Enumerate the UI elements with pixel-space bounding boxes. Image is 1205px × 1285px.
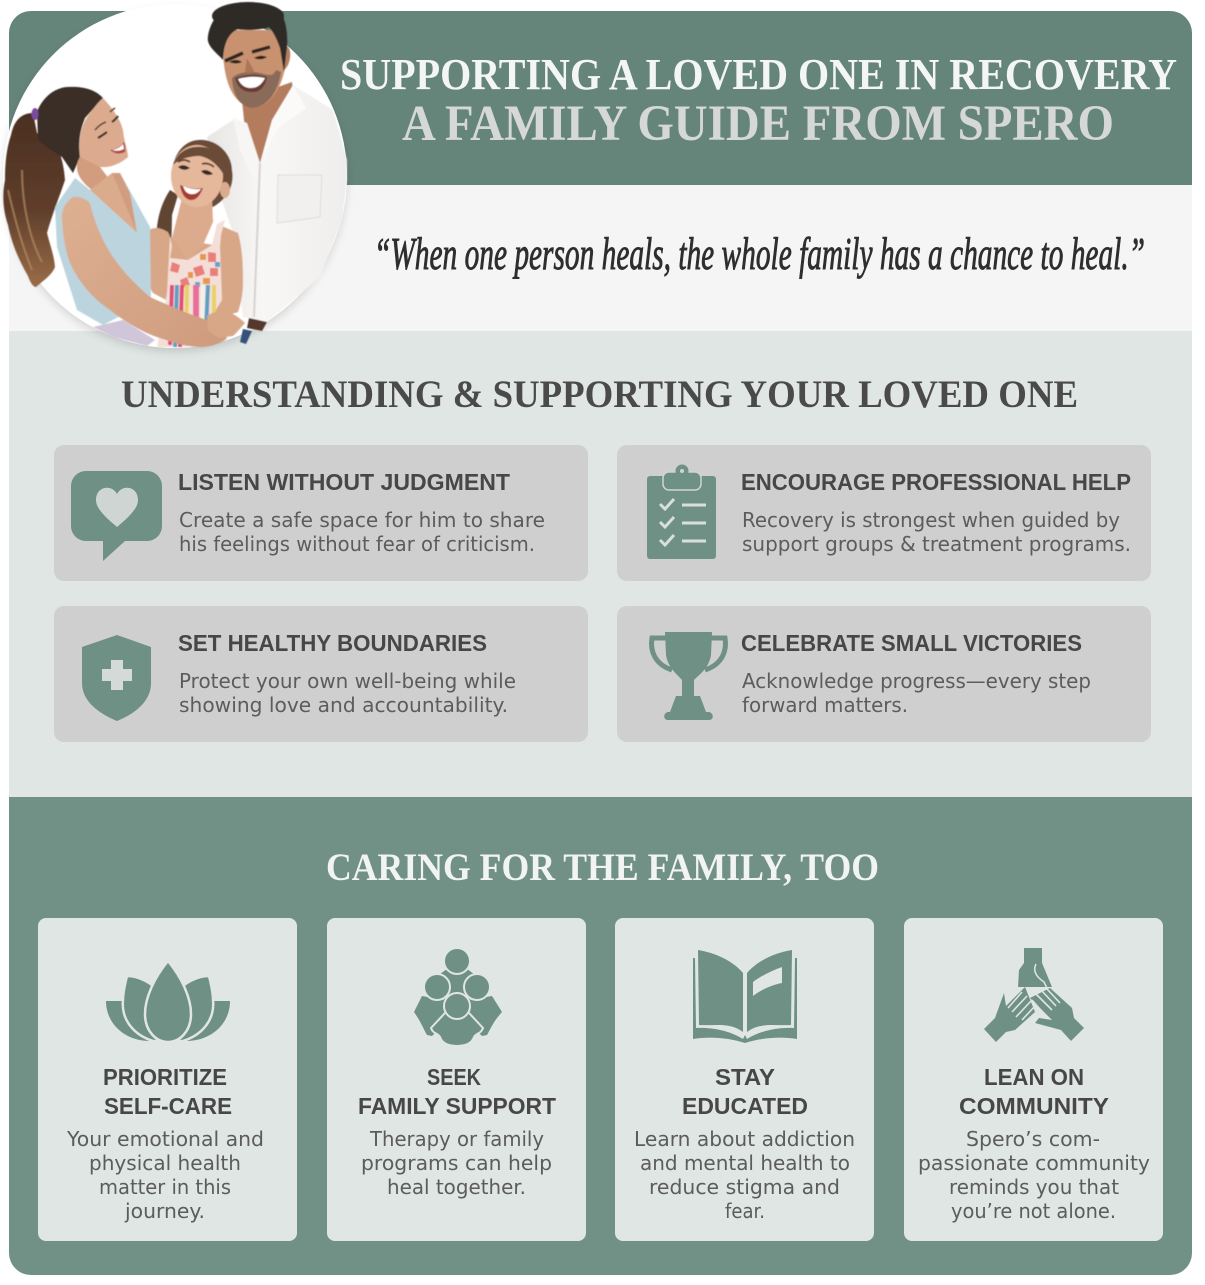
panel: understanding and supporting (9, 331, 1192, 797)
card text: reduce stigma and (649, 1175, 840, 1199)
heading: understanding and supporting: UNDERSTANDING & SUPPORTING YOUR LOVED ONE (121, 373, 1078, 416)
heading: caring for the family: CARING FOR THE FAMILY, TOO (326, 846, 879, 889)
card text: Spero’s com- (966, 1127, 1100, 1151)
family photo circle (3, 2, 347, 348)
card heading: SELF-CARE (104, 1093, 232, 1119)
card text (179, 669, 516, 717)
card text: Your emotional and (66, 1127, 264, 1151)
card heading: ENCOURAGE PROFESSIONAL HELP (741, 469, 1131, 495)
icon: trophy (652, 632, 725, 720)
card heading: SET HEALTHY BOUNDARIES (178, 630, 487, 656)
woman (3, 87, 245, 347)
card text: showing love and accountability. (179, 693, 508, 717)
card: lean on community (904, 918, 1163, 1241)
card text: and mental health to (640, 1151, 850, 1175)
card heading: FAMILY SUPPORT (358, 1093, 556, 1119)
card text (66, 1127, 264, 1223)
icon: open book (693, 950, 797, 1043)
quote band (9, 185, 1192, 331)
card heading: PRIORITIZE (103, 1064, 227, 1090)
icon: lotus (106, 961, 230, 1042)
icon: family group (414, 948, 502, 1046)
card text (918, 1127, 1150, 1223)
panel: caring for the family (9, 797, 1192, 1275)
card text: you’re not alone. (951, 1199, 1116, 1223)
card heading: SEEK (427, 1064, 481, 1090)
card heading (682, 1064, 808, 1119)
card text: Recovery is strongest when guided by (742, 508, 1120, 532)
card heading: EDUCATED (682, 1093, 808, 1119)
card heading: CELEBRATE SMALL VICTORIES (741, 630, 1082, 656)
card heading (959, 1064, 1109, 1119)
card text: matter in this (99, 1175, 231, 1199)
card text (179, 508, 545, 556)
card: stay educated (615, 918, 874, 1241)
card heading: STAY (715, 1064, 775, 1090)
icon: joined hands (984, 948, 1084, 1042)
card text: reminds you that (949, 1175, 1119, 1199)
card text: passionate community (918, 1151, 1150, 1175)
card text: heal together. (387, 1175, 526, 1199)
card: seek family support (327, 918, 586, 1241)
title line 2: A FAMILY GUIDE FROM SPERO (402, 96, 1114, 152)
card text: Create a safe space for him to share (179, 508, 545, 532)
card text (742, 508, 1131, 556)
icon: heart speech bubble (71, 471, 162, 561)
card: encourage professional help (617, 445, 1151, 581)
card text: programs can help (361, 1151, 552, 1175)
card: celebrate small victories (617, 606, 1151, 742)
card text: fear. (725, 1199, 765, 1223)
card text: Learn about addiction (634, 1127, 855, 1151)
card heading: LISTEN WITHOUT JUDGMENT (178, 469, 510, 495)
card text: Protect your own well-being while (179, 669, 516, 693)
man (207, 2, 347, 344)
card text: Therapy or family (369, 1127, 544, 1151)
card text: Acknowledge progress—every step (742, 669, 1091, 693)
card heading: COMMUNITY (959, 1093, 1109, 1119)
card text: his feelings without fear of criticism. (179, 532, 535, 556)
card: listen without judgment (54, 445, 588, 581)
girl (145, 140, 243, 347)
card text (634, 1127, 855, 1223)
card heading (358, 1064, 556, 1119)
card text: physical health (89, 1151, 241, 1175)
header band (9, 11, 1192, 185)
card text: forward matters. (742, 693, 908, 717)
icon: clipboard (647, 464, 716, 559)
title (340, 50, 1177, 152)
card text: support groups & treatment programs. (742, 532, 1131, 556)
card text (361, 1127, 552, 1199)
card heading: LEAN ON (984, 1064, 1084, 1090)
icon: shield with cross (82, 635, 151, 721)
card text (742, 669, 1091, 717)
card text: journey. (124, 1199, 205, 1223)
card: set healthy boundaries (54, 606, 588, 742)
card: prioritize self-care (38, 918, 297, 1241)
card heading (103, 1064, 232, 1119)
